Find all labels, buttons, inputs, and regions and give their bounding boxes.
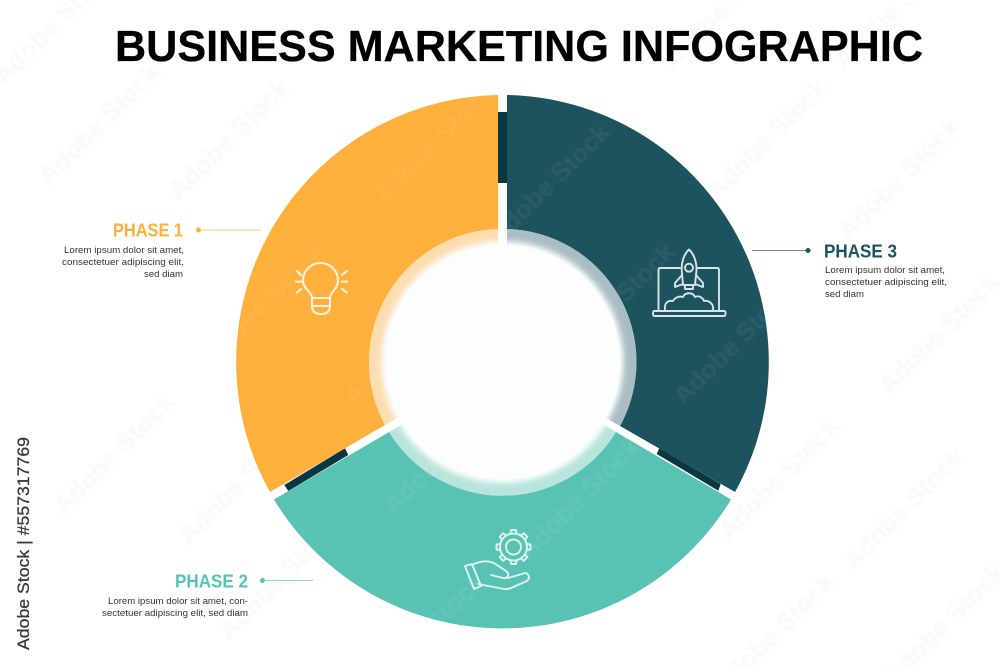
watermark on panels: Adobe Stock [367,76,501,210]
center white circle [382,241,624,483]
watermark on background: Adobe Stock [712,411,846,545]
watermark on panels: Adobe Stock [337,276,471,410]
heading: phase 2: PHASE 2 [175,572,248,592]
watermark on panels: Adobe Stock [512,431,646,565]
segment: phase 1 orange [236,95,498,492]
heading: phase 3: PHASE 3 [824,242,897,262]
icon: light bulb [296,263,347,314]
connector: left dark band [284,448,348,491]
body: phase 3: Lorem ipsum dolor sit amet, [825,265,945,276]
body: phase 1 [62,245,184,280]
watermark on background: Adobe Stock [162,71,296,205]
segment: phase 3 navy [507,95,769,492]
connector: top dark band [498,112,507,183]
label: phase 2 [102,572,313,619]
watermark on panels [197,76,801,667]
watermark on background: Adobe Stock [32,56,166,190]
body: phase 2: sectetuer adipiscing elit, sed diam [102,608,248,619]
frosted ring [369,229,636,496]
body: phase 1: consectetuer adipiscing elit, [62,257,184,268]
heading: phase 1: PHASE 1 [113,220,183,240]
watermark on background: Adobe Stock [172,416,306,550]
body: phase 2 [102,596,248,619]
icon: rocket and laptop [653,250,726,316]
body: phase 3 [825,265,947,300]
donut chart [236,95,769,628]
body: phase 1: Lorem ipsum dolor sit amet, [64,245,184,256]
connector: phase 3 [752,248,810,253]
body: phase 2: Lorem ipsum dolor sit amet, con- [108,596,248,607]
watermark on panels: Adobe Stock [482,116,616,250]
icon: hand with gear [465,530,530,589]
watermark on panels: Adobe Stock [667,276,801,410]
watermark on background: Adobe Stock [47,386,181,520]
connector: phase 1 [196,228,261,232]
watermark on background: Adobe Stock [837,441,971,575]
stock credit: Adobe Stock | #557317769 [14,437,33,650]
label: phase 1 [62,220,261,280]
segment: phase 2 teal [274,432,731,628]
watermark on panels: Adobe Stock [197,236,331,370]
body: phase 3: sed diam [825,289,864,300]
watermark on background: Adobe Stock [700,71,834,205]
watermark on background: Adobe Stock [212,511,346,645]
body: phase 1: sed diam [144,269,183,280]
title: BUSINESS MARKETING INFOGRAPHIC [115,22,923,71]
body: phase 3: consectetuer adipiscing elit, [825,277,947,288]
connector: phase 2 [260,578,313,583]
watermark on panels: Adobe Stock [547,236,681,370]
label: phase 3 [752,242,947,300]
connector: right dark band [657,448,721,491]
watermark on background: Adobe Stock [832,111,966,245]
watermark on panels: Adobe Stock [377,386,511,520]
